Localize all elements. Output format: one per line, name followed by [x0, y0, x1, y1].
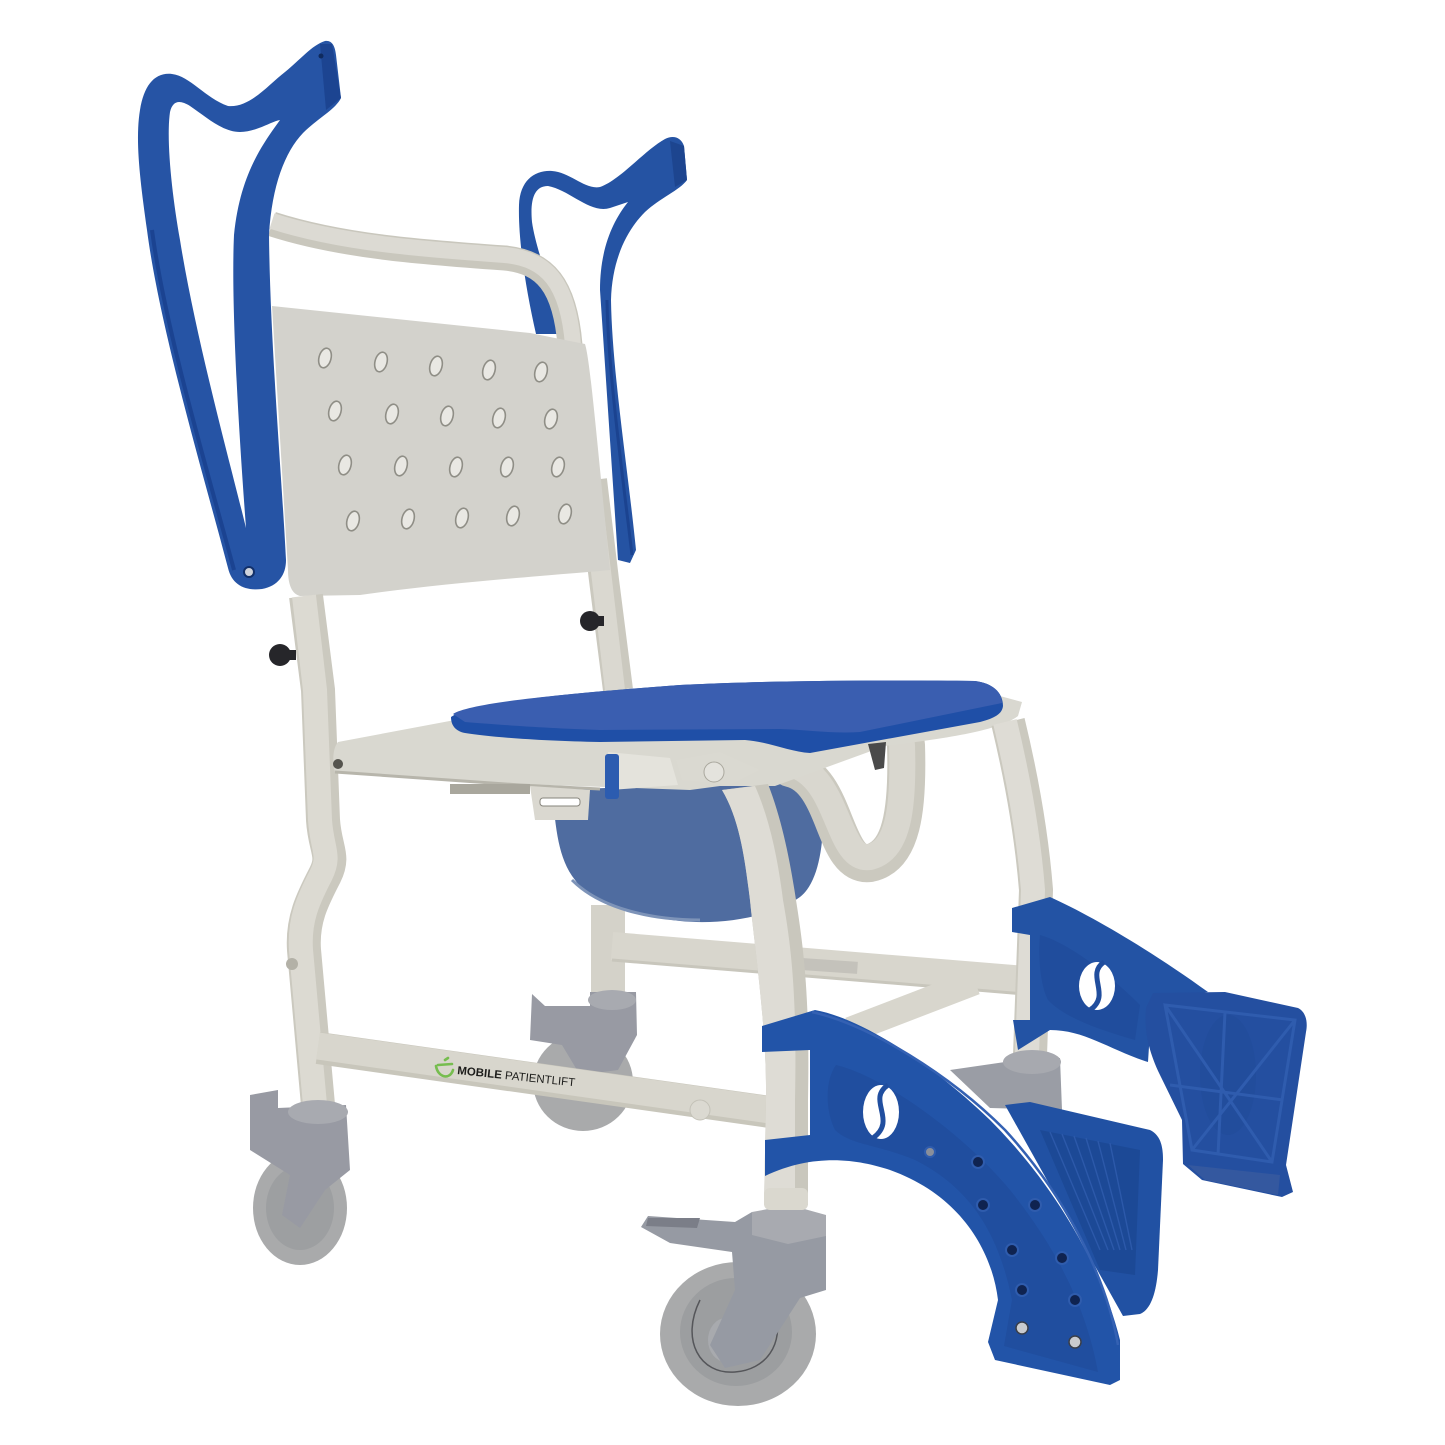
rear right caster	[950, 1050, 1062, 1110]
height adjustment knobs	[269, 611, 604, 666]
footrest adjustment holes	[925, 1147, 1081, 1306]
front caster and wheel	[641, 1188, 826, 1406]
top rail of backrest	[272, 221, 573, 345]
mounting screws	[1016, 1322, 1081, 1348]
perforated backrest panel	[272, 306, 610, 596]
padded blue seat	[451, 680, 1003, 753]
right push handle (rear)	[519, 137, 687, 563]
left rear caster	[250, 1090, 350, 1265]
brand logo: Mobile Patientlift	[436, 1058, 576, 1089]
rear blue leg rest arm	[1012, 897, 1208, 1062]
front frame bar with logo	[318, 1046, 770, 1120]
blue seat release latch	[605, 754, 619, 799]
left frame upright	[286, 596, 329, 1105]
commode bucket	[552, 780, 823, 922]
rear centre leg	[591, 905, 625, 995]
left push handle (front)	[138, 41, 341, 589]
ventilation slots	[317, 347, 573, 532]
front frame leg	[722, 784, 808, 1205]
seat base	[333, 696, 1022, 820]
rear caster (hidden side)	[530, 990, 637, 1131]
rear and cross frame bars	[612, 946, 1025, 1030]
logo mark	[436, 1058, 453, 1076]
logo wordmark: MOBILE PATIENTLIFT	[457, 1065, 576, 1089]
front blue leg rest arc	[762, 1010, 1120, 1385]
rear footplate underside	[1146, 992, 1307, 1197]
right backrest upright	[590, 480, 618, 690]
icon: S logo	[863, 1085, 899, 1139]
U-shaped seat support tube	[790, 745, 906, 863]
rear right leg	[1005, 722, 1036, 1055]
front footplate	[1005, 1102, 1163, 1316]
icon: S logo	[1079, 962, 1115, 1010]
